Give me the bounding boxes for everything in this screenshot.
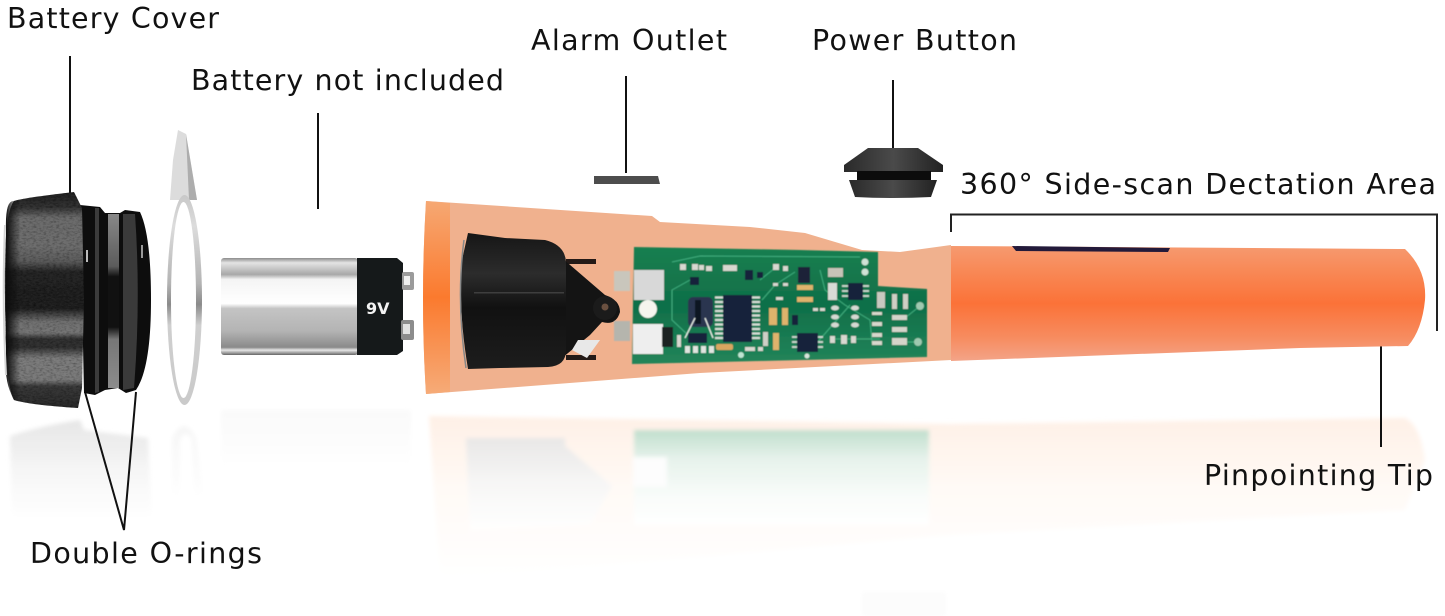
icon: power button <box>844 148 943 198</box>
battery holder <box>460 233 620 369</box>
label: Battery not included: Battery not included <box>191 64 504 97</box>
circuit board <box>614 247 927 364</box>
icon: battery cover with O-rings <box>4 192 151 408</box>
battery contact pads <box>614 270 664 354</box>
pinpointer body <box>423 201 1425 394</box>
icon: alarm outlet <box>594 176 660 184</box>
label: Pinpointing Tip: Pinpointing Tip <box>1204 459 1433 492</box>
leader lines <box>70 56 1381 530</box>
label: Double O-rings: Double O-rings <box>30 537 262 570</box>
chips and components <box>662 258 924 358</box>
label: Power Button: Power Button <box>812 24 1017 57</box>
copper traces <box>672 256 920 345</box>
label: Alarm Outlet: Alarm Outlet <box>531 24 727 57</box>
label: Battery Cover: Battery Cover <box>7 2 219 35</box>
icon: 9V battery: 9V <box>366 299 390 318</box>
label: 360 degree Side-scan Dectation Area: 360° Side-scan Dectation Area <box>960 168 1436 201</box>
icon: washer ring <box>167 130 202 405</box>
icon: 9V battery <box>221 258 414 355</box>
bracket: 360 degree side-scan area <box>951 214 1437 331</box>
reflection on the floor <box>10 410 1425 616</box>
